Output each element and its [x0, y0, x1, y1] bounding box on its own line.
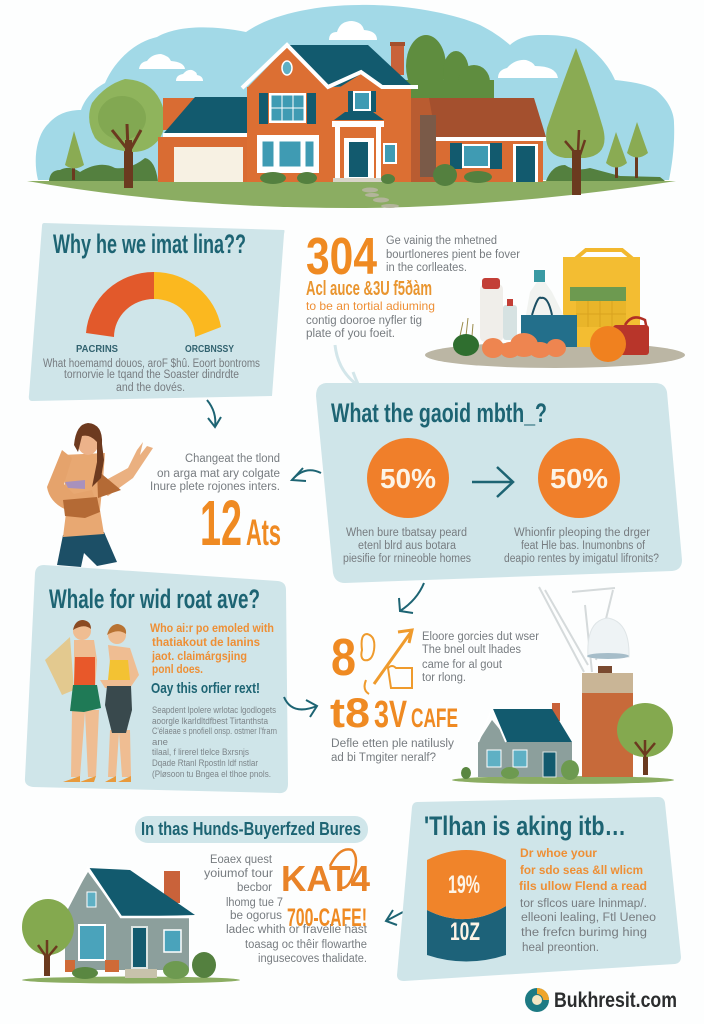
garage: [158, 97, 247, 182]
arrow: panel to text: [292, 468, 321, 481]
chimney: [552, 703, 560, 721]
panel: why: [29, 223, 284, 401]
stat side text: in the corlleates.: [386, 262, 467, 274]
stat: 12 Ats: Ats: [246, 512, 281, 553]
head two: [108, 626, 126, 644]
gray text: the frefcn burimg hing: [521, 927, 647, 939]
text: defle: Defle etten ple natilusly: [331, 738, 454, 750]
bushes: [49, 158, 665, 181]
orange fruit: [590, 326, 626, 362]
stat side text: Ge vainig the mhetned: [386, 235, 497, 247]
left arm: [47, 450, 96, 512]
walls: [65, 872, 189, 970]
purple top: [65, 480, 85, 489]
heading: What the gaoid mbth_?: [331, 398, 547, 428]
text block: quest: be ogorus: [230, 910, 282, 922]
tower: [582, 693, 633, 777]
gray text: elleoni lealing, Ftl Ueneo: [521, 912, 656, 924]
dark skirt: [105, 686, 132, 733]
woman illustration: [47, 423, 153, 567]
text: defle: [331, 738, 454, 764]
woman one torso: [74, 640, 97, 690]
text block: quest: lhomg tue 7: [226, 897, 283, 909]
text block: change: Inure plete rojones inters.: [150, 481, 280, 493]
window: [79, 925, 105, 960]
orange text: thatiakout de lanins: [152, 635, 260, 649]
stat: 700-CAFE: 700-CAFE!: [287, 904, 367, 932]
orange text: [150, 621, 274, 676]
orange text: ponl does.: [152, 662, 203, 676]
bushes: [561, 760, 579, 780]
bag: [63, 470, 121, 518]
walls: [478, 720, 572, 777]
arrow to house text: [386, 910, 403, 925]
subheading: Oay this orfier rext!: [151, 680, 260, 697]
broccoli: [453, 318, 479, 356]
arrow: whale to cafe: [284, 697, 317, 717]
roof: [88, 868, 195, 917]
brick bases: [65, 960, 119, 972]
door: [132, 927, 147, 968]
house with tower illustration: [452, 587, 674, 784]
stat: 8% with scribble: [331, 629, 412, 694]
logo icon: [525, 988, 549, 1012]
text block: quest: Eoaex quest: [210, 854, 273, 866]
small body text: ane: [152, 737, 168, 747]
small body text: tilaal, f lirerel tlelce Bxrsnjs: [152, 747, 249, 757]
text block: quest: ladec whith or fravelie hast: [226, 924, 368, 936]
body text: and the dovés.: [116, 382, 185, 394]
food and supplies illustration: [425, 250, 685, 368]
small body text: C'élaeae s pnofiell onsp. ostmer l'frarn: [152, 726, 277, 736]
tree: [44, 940, 50, 976]
text block: change: Changeat the tlond: [185, 453, 280, 465]
text block: quest: becbor: [237, 882, 272, 894]
cylinder chart: [427, 850, 506, 962]
green shorts: [70, 685, 101, 712]
sky blob: [36, 5, 674, 180]
shrubs: [72, 967, 98, 979]
pill heading: In thas Hunds-Buyerfzed Bures: [141, 819, 361, 839]
stat side text: The bnel oult lhades: [422, 644, 521, 656]
panel: whale: [25, 565, 288, 793]
yellow top: [108, 660, 130, 680]
left tree: [89, 79, 165, 188]
stat: 8% with scribble: 8: [331, 629, 356, 687]
small trees left: [65, 131, 84, 180]
stat description: contig dooroe nyfler tig: [306, 315, 422, 327]
caption left: When bure tbatsay peard: [346, 527, 467, 539]
stat subheading: Acl auce &3U f5ðàm: [306, 278, 432, 300]
stat: KAT4 with flourish: KAT4: [281, 858, 370, 899]
head one: [73, 622, 91, 640]
stat: t8 3V CAFE: CAFE: [411, 703, 458, 733]
body text: What hoemamd douos, aroF $hû. Eoort bontroms: [43, 358, 260, 370]
back trees: [404, 35, 494, 99]
panel: than: [397, 797, 681, 981]
body text: [43, 358, 260, 394]
right wing: [411, 98, 546, 186]
text block: quest: ingusecoves thalidate.: [258, 953, 367, 965]
panel: what: [316, 383, 682, 583]
text: defle: ad bi Tmgiter neralf?: [331, 752, 436, 764]
cone tree right: [546, 48, 605, 195]
stat side text: bourtloneres pient be fover: [386, 249, 520, 261]
caption left: piesifie for rnineoble homes: [343, 553, 471, 565]
ground: [22, 976, 240, 984]
small body text: (Pløsoon tu Bngea el tlhoe pnols.: [152, 769, 271, 779]
woman two arm and torso: [100, 645, 139, 688]
attic window: [87, 892, 96, 907]
stat description: to be an tortial adiuming: [306, 299, 435, 313]
stat: 304: 304: [306, 228, 377, 286]
woman two legs: [108, 730, 131, 777]
stat circle right: [538, 438, 620, 518]
torso: [62, 453, 105, 537]
stat side text: tor rlong.: [422, 672, 466, 684]
woman one legs: [71, 710, 99, 777]
arrow: [472, 467, 513, 497]
caption left: etenl blrd aus botara: [358, 540, 457, 552]
door: [543, 752, 556, 777]
roof: [492, 709, 572, 742]
arrow: panel to woman: [207, 400, 221, 427]
text block: quest: [204, 854, 368, 965]
text block: change: on arga mat ary colgate: [157, 468, 280, 480]
clouds: [139, 21, 558, 81]
bottles: [480, 270, 566, 342]
oranges: [482, 333, 566, 358]
stat description: plate of you foeit.: [306, 328, 395, 340]
stat side text: [386, 235, 520, 274]
raised arm: [98, 442, 153, 496]
gauge label left: PACRINS: [76, 344, 118, 355]
caption left: [343, 527, 471, 565]
women illustration: [45, 620, 139, 782]
stepping stones: [362, 188, 399, 208]
gray text: [520, 898, 656, 954]
stat side text: came for al gout: [422, 659, 503, 671]
caption right: [504, 527, 659, 565]
heading: 'Tlhan is aking itb…: [424, 811, 626, 841]
shoes: [63, 776, 131, 782]
small body text: [152, 705, 277, 779]
hair one: [73, 620, 91, 630]
tree: [643, 735, 648, 775]
stat: t8 3V CAFE: [330, 689, 458, 736]
glass dome: [588, 618, 629, 657]
yellow bag: [563, 250, 640, 347]
heading: Why he we imat lina??: [53, 229, 246, 259]
windows: [487, 750, 501, 767]
windmill lines: [539, 587, 615, 672]
stat circle left: [367, 438, 449, 518]
text block: quest: toasag oc thêir flowarthe: [245, 939, 367, 951]
blue bag: [521, 298, 577, 347]
body text: tornorvie le tqand the Soaster dindrdte: [64, 369, 239, 381]
orange text: Who ai:r po emoled with: [150, 621, 274, 635]
logo: [525, 988, 677, 1012]
gauge label right: ORCBNSSY: [185, 344, 234, 355]
orange text: [519, 846, 647, 893]
cylinder chart: 10Z: [450, 918, 480, 946]
heading: Whale for wid roat ave?: [49, 584, 260, 614]
gable trim: [65, 868, 195, 917]
stat: 12 Ats: 12: [200, 487, 242, 559]
cylinder chart: 19%: [448, 871, 480, 899]
small body text: Seapdent lpolere wrlotac lgodlogets: [152, 705, 276, 715]
stat: t8 3V CAFE: 3V: [374, 694, 407, 736]
orange text: jaot. claimárgsjing: [151, 649, 247, 663]
text block: change: [150, 453, 280, 493]
jeans: [57, 532, 117, 567]
hair two: [107, 624, 126, 635]
stat circle left: 50%: [380, 463, 436, 494]
small trees right: [606, 122, 648, 178]
gauge chart: [86, 272, 221, 337]
gray text: heal preontion.: [522, 942, 599, 954]
gray text: tor sflcos uare lninmap/.: [520, 898, 647, 910]
orange text: Dr whoe your: [520, 846, 597, 860]
chimney: [164, 871, 180, 903]
hero illustration: brick house: [27, 5, 676, 208]
ground: [452, 776, 674, 784]
logo text: Bukhresit.com: [554, 989, 677, 1012]
caption right: feat Hle bas. Inumonbns of: [521, 540, 646, 552]
orange top: [74, 657, 95, 685]
small body text: aoorgle lkarldltdfbest Tirtanthsta: [152, 716, 268, 726]
small body text: Dqade Rtanl Rpostln ldf nstlar: [152, 758, 258, 768]
pill heading: [135, 816, 368, 843]
stat side text: Eloore gorcies dut wser: [422, 631, 539, 643]
hair: [74, 423, 104, 487]
main house: [242, 42, 418, 184]
text block: quest: yoiumof tour: [204, 868, 273, 880]
stat side text: [422, 631, 539, 684]
caption right: Whionfir pleoping the drger: [514, 527, 650, 539]
stat: 304: [306, 228, 520, 340]
caption right: deapio rentes by imigatul lifronits?: [504, 553, 659, 565]
ground: [27, 181, 676, 208]
stat: t8 3V CAFE: t8: [330, 689, 370, 736]
curved connector: [335, 345, 359, 386]
steps: [125, 969, 157, 978]
stat circle right: 50%: [550, 463, 608, 494]
red bucket: [613, 317, 649, 355]
right window: [164, 930, 181, 952]
head: [77, 427, 99, 455]
small house illustration: [22, 868, 240, 984]
orange text: fils ullow Flend a read: [519, 879, 647, 893]
stat description: [306, 299, 435, 340]
orange text: for sdo seas &ll wlicm: [520, 863, 643, 877]
cloak: [45, 637, 74, 695]
arrow: panel down: [399, 583, 424, 613]
